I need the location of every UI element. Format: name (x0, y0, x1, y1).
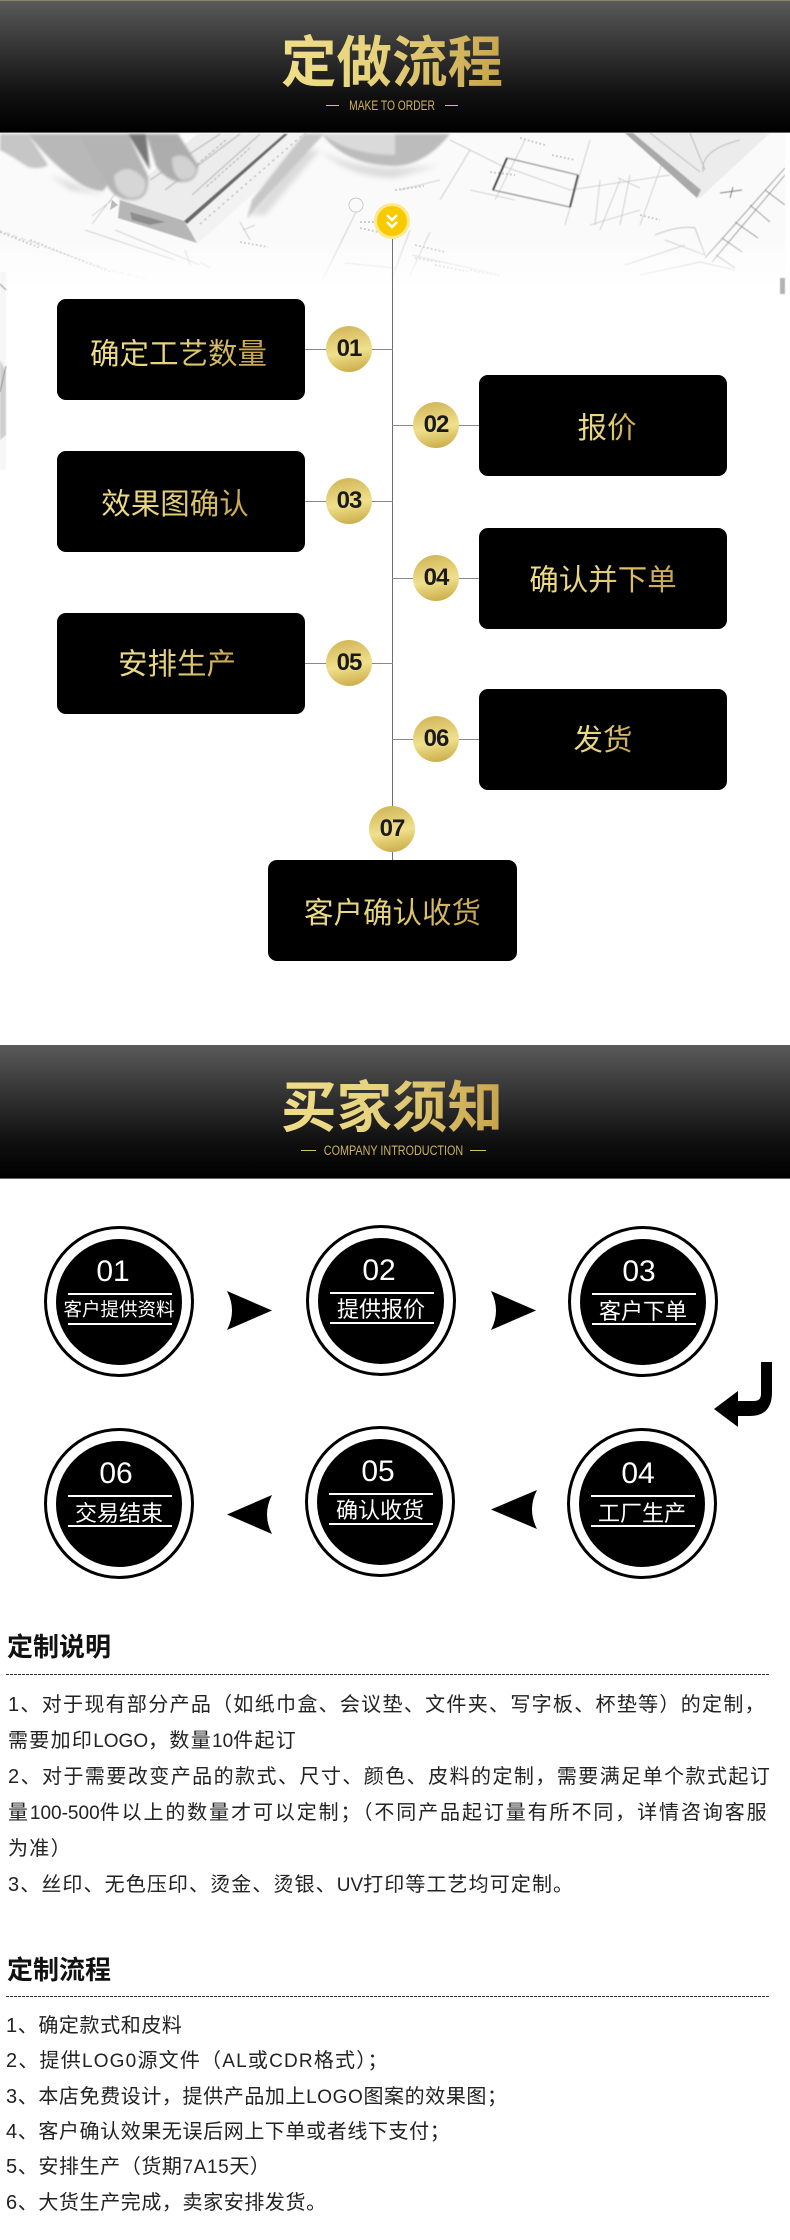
flow circle 04: 04 (621, 1457, 655, 1490)
flow circle 06: 06 (99, 1457, 133, 1490)
arrow: 02 to 03 (491, 1291, 536, 1330)
subtitle: make to order: MAKE TO ORDER (349, 98, 435, 113)
hand and fingers (0, 134, 450, 200)
flow circle 03 (568, 1226, 718, 1377)
text block: customization process: 6、大货生产完成，卖家安排发货。 (6, 2192, 327, 2214)
flow circle 06: 交易结束 (75, 1501, 163, 1526)
rolled plans (620, 133, 790, 285)
arrow: 05 to 06 (227, 1495, 272, 1534)
step 04: 确认并下单 (529, 564, 677, 597)
flow circle 01 (44, 1226, 194, 1377)
flow circle 05: 确认收货 (336, 1498, 424, 1523)
step 03: 效果图确认 (101, 488, 249, 521)
heading: 定制说明: 定制说明 (7, 1632, 111, 1662)
arrow: 03 to 04 return (714, 1362, 772, 1427)
flow circle 04: 工厂生产 (598, 1501, 686, 1526)
flow circle 05 (305, 1426, 455, 1577)
arrow: 04 to 05 (491, 1490, 537, 1529)
step 05: 安排生产 (118, 648, 236, 681)
subtitle: company introduction: COMPANY INTRODUCTION (324, 1143, 463, 1158)
icon: yellow chevron badge (374, 203, 410, 239)
title: 定做流程: 定做流程 (281, 32, 503, 94)
flow circle 03: 客户下单 (599, 1299, 687, 1324)
step 05: 05 (337, 649, 361, 676)
text block: customization notes: 1、对于现有部分产品（如纸巾盒、会议垫、文件夹、写字板、杯垫等）的定制， (8, 1694, 766, 1716)
text block: customization process: 4、客户确认效果无误后网上下单或者线下支付； (6, 2121, 450, 2143)
flow circle 04 (567, 1428, 717, 1579)
text block: customization notes: 需要加印LOGO，数量10件起订 (8, 1730, 297, 1752)
step 07: 客户确认收货 (304, 897, 481, 930)
left edge strip of the photo (0, 272, 6, 470)
flow circle 03: 03 (622, 1255, 656, 1288)
flow circle 01: 01 (96, 1255, 130, 1288)
text block: customization notes: 2、对于需要改变产品的款式、尺寸、颜色、皮料的定制，需要满足单个款式起订 (8, 1766, 771, 1788)
header: make to order (0, 0, 790, 133)
text block: customization notes: 3、丝印、无色压印、烫金、烫银、UV打印等工艺均可定制。 (8, 1874, 574, 1896)
step 06 (413, 689, 727, 790)
step 07 (268, 806, 517, 961)
text block: customization process (6, 2015, 508, 2214)
text block: customization process: 1、确定款式和皮料 (6, 2015, 183, 2037)
step 01 (57, 299, 372, 400)
flow circle 02 (306, 1225, 456, 1376)
photo: hands measuring on blueprints (0, 133, 786, 470)
flow circle 02: 提供报价 (337, 1297, 425, 1322)
timeline connector lines (305, 239, 479, 860)
small scribbles of the plan (0, 138, 660, 276)
flow circle 01: 客户提供资料 (63, 1299, 174, 1320)
header: buyer notice (0, 1045, 790, 1179)
flow circle 05: 05 (361, 1455, 395, 1488)
title: 买家须知: 买家须知 (281, 1077, 503, 1139)
text block: customization process: 3、本店免费设计，提供产品加上LOGO图案的效果图； (6, 2086, 508, 2108)
flow circle 06 (44, 1428, 194, 1579)
step 01: 确定工艺数量 (90, 338, 267, 371)
step 06: 06 (424, 725, 448, 752)
step 05 (57, 613, 372, 714)
step 06: 发货 (573, 724, 632, 757)
step 02: 02 (424, 411, 448, 438)
plan room (493, 158, 578, 207)
text block: customization notes: 为准） (8, 1838, 72, 1860)
ruler (118, 133, 320, 243)
arrow: 01 to 02 (227, 1291, 272, 1330)
step 03 (57, 451, 372, 552)
text block: customization notes (8, 1694, 771, 1896)
flow circle 02: 02 (362, 1254, 396, 1287)
text block: customization notes: 量100-500件以上的数量才可以定制；（不同产品起订量有所不同，详情咨询客服 (8, 1802, 769, 1824)
step 01: 01 (337, 335, 361, 362)
heading: 定制流程: 定制流程 (7, 1955, 111, 1985)
text block: customization process: 5、安排生产（货期7A15天） (6, 2156, 271, 2178)
text block: customization process: 2、提供LOG0源文件（AL或CDR格式）； (6, 2050, 389, 2072)
step 02: 报价 (577, 412, 636, 445)
step 04: 04 (424, 564, 448, 591)
step 03: 03 (337, 487, 361, 514)
step 04 (413, 528, 727, 629)
step 02 (413, 375, 727, 476)
step 07: 07 (380, 815, 404, 842)
